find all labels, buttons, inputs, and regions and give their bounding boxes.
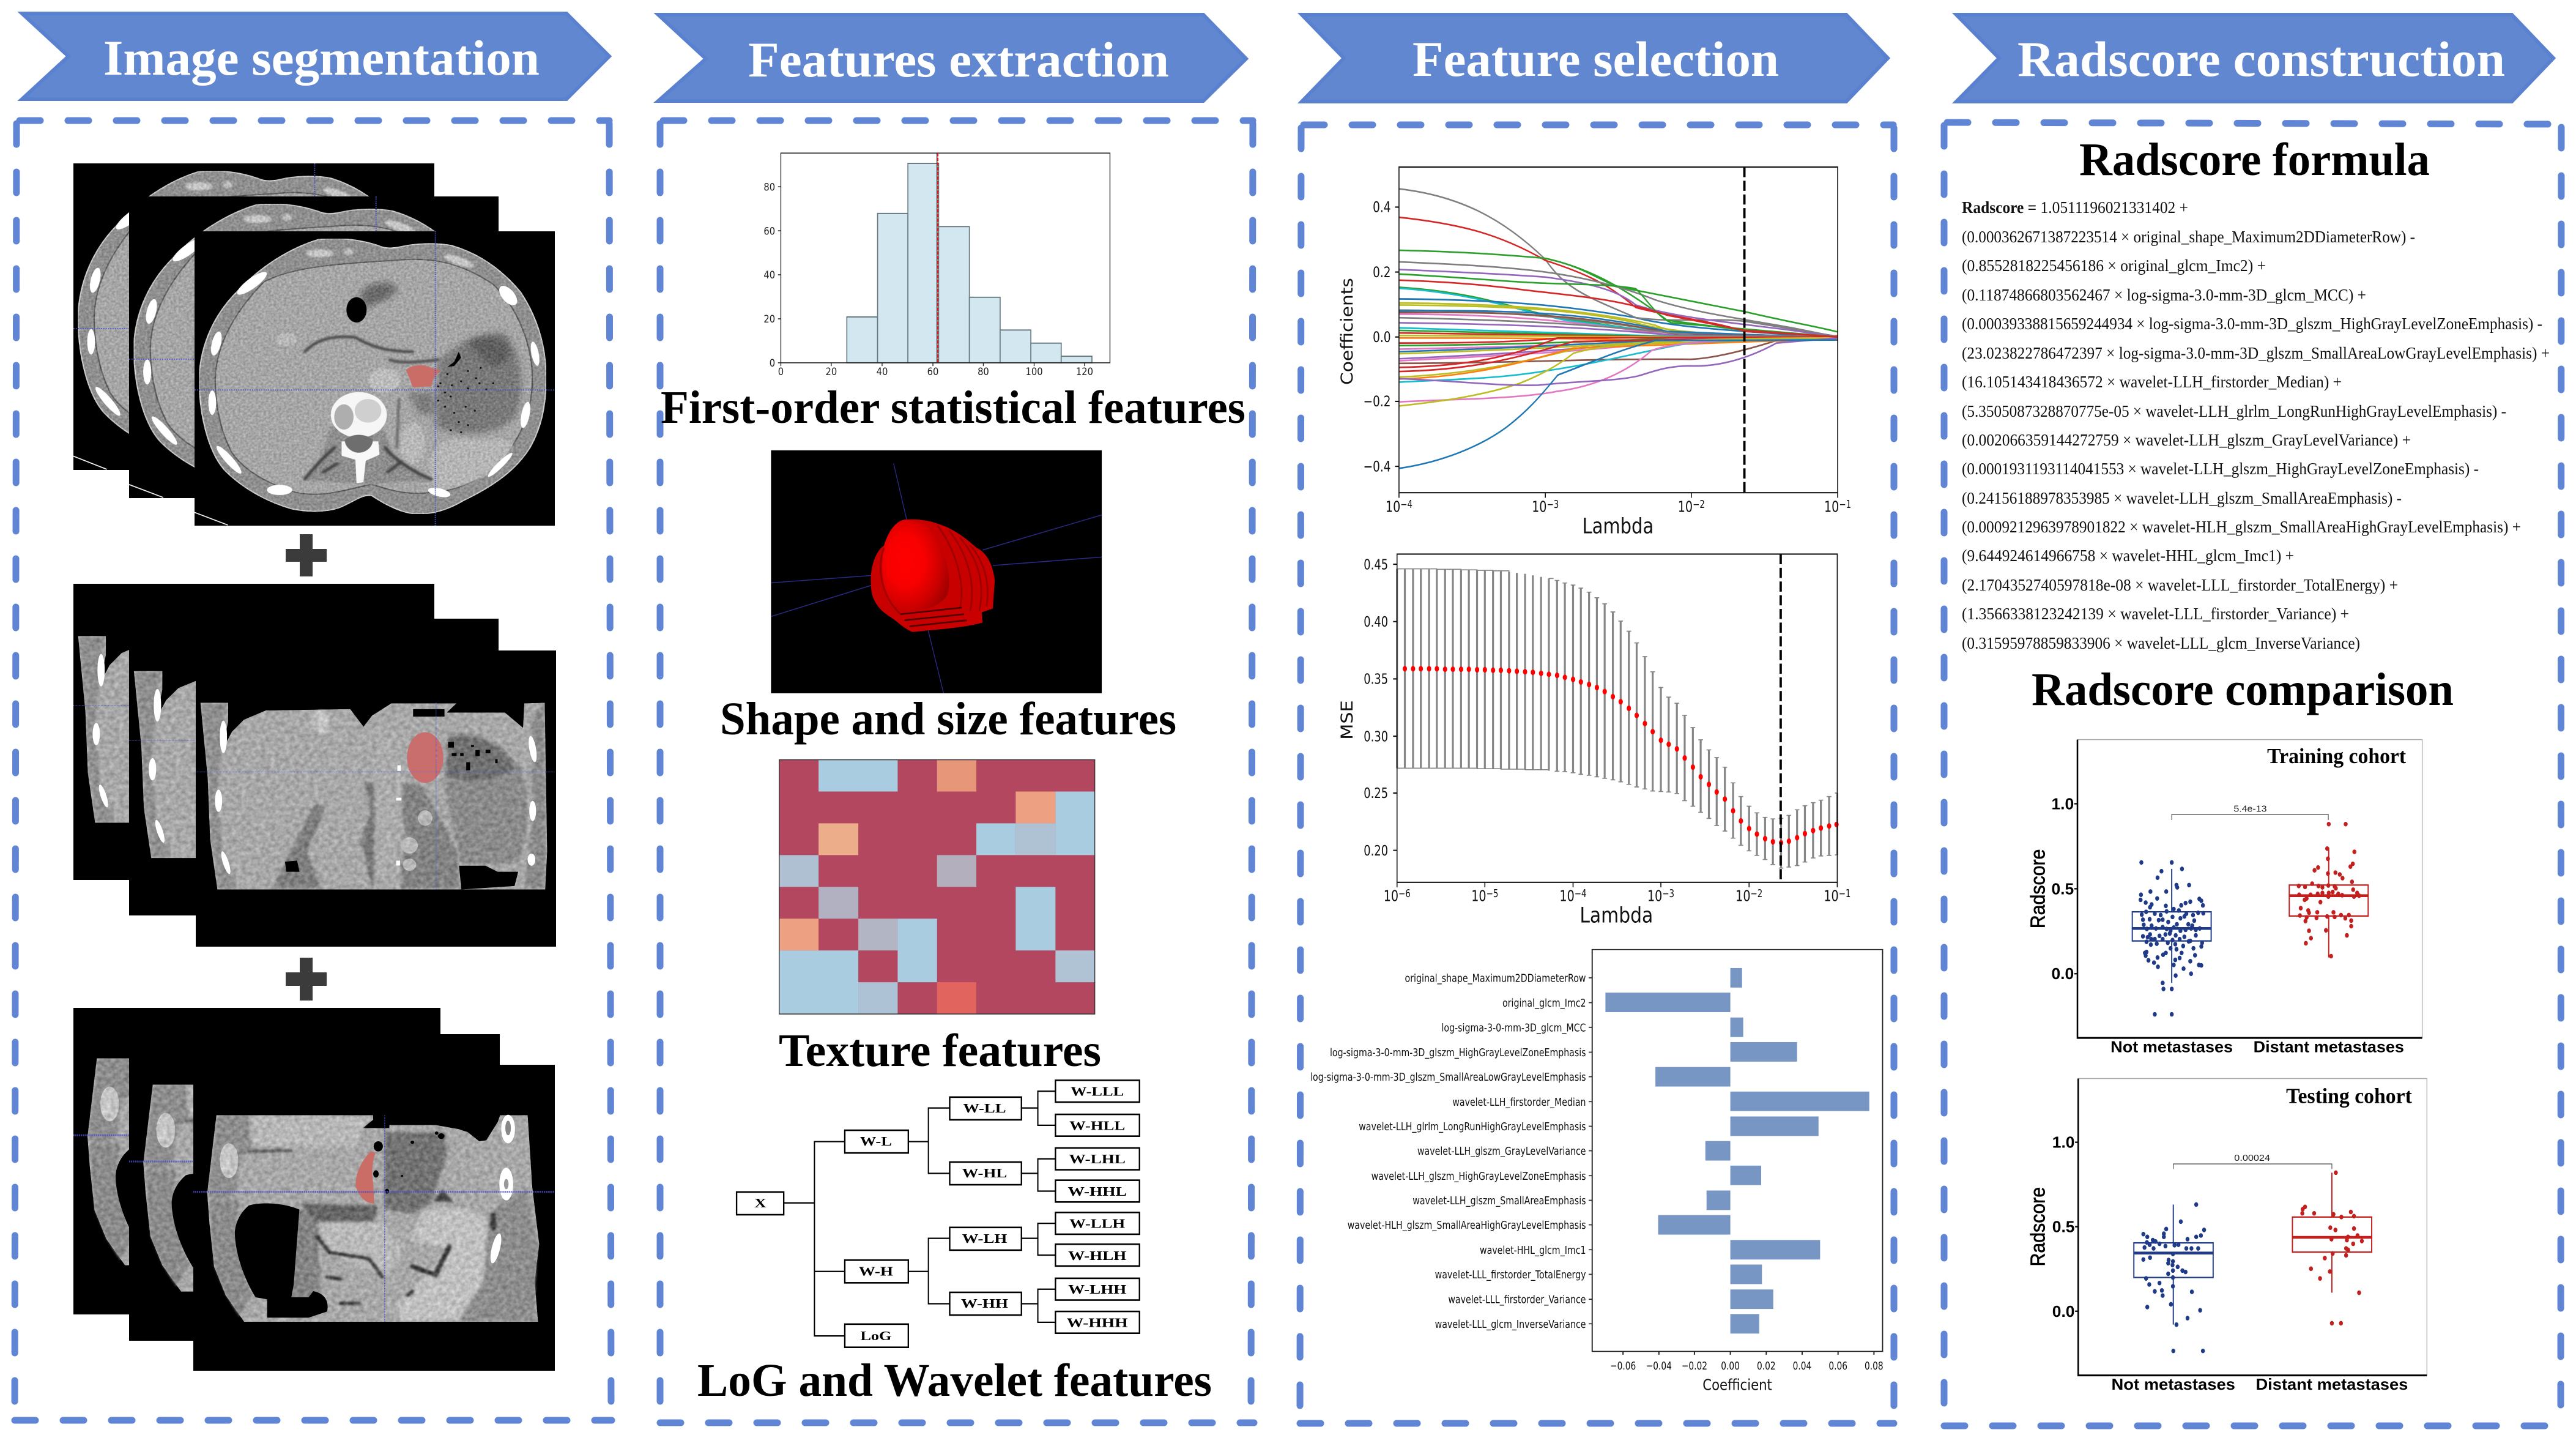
- feature coefficient bar chart: wavelet-LLH_glszm_GrayLevelVariance: [1417, 1145, 1586, 1158]
- box plot: testing cohort: 0.0: [2052, 1303, 2075, 1321]
- wavelet decomposition tree: W-HHL: [1067, 1185, 1127, 1199]
- LASSO coefficient path chart: −1: [1839, 498, 1851, 511]
- 3D tumour render: [771, 450, 1102, 693]
- dashed frame 3: [1300, 125, 1894, 1423]
- CT stack: sagittal: [73, 1008, 555, 1371]
- wavelet decomposition tree: LoG: [860, 1329, 891, 1343]
- cross-validation MSE chart: 0.30: [1364, 728, 1388, 745]
- feature coefficient bar chart: [1310, 950, 1884, 1394]
- box plot: testing cohort: 1.0: [2052, 1134, 2075, 1152]
- formula text block: [1962, 198, 2550, 652]
- LASSO coefficient path chart: Coefficients: [1338, 278, 1357, 385]
- wavelet decomposition tree: W-LHH: [1068, 1283, 1127, 1297]
- histogram chart: 40: [763, 269, 775, 281]
- formula text block: (0.00039338815659244934 × log-sigma-3.0-mm-3D_glszm_HighGrayLevelZoneEmphasis) -: [1962, 315, 2542, 333]
- feature coefficient bar chart: wavelet-LLL_firstorder_Variance: [1448, 1293, 1586, 1306]
- formula text block: (0.31595978859833906 × wavelet-LLL_glcm_InverseVariance): [1962, 634, 2360, 652]
- wavelet decomposition tree: W-HLL: [1069, 1119, 1125, 1133]
- box plot: testing cohort: 0.5: [2052, 1218, 2075, 1236]
- histogram chart: 20: [826, 365, 837, 378]
- panel: features extraction: [660, 121, 1254, 1423]
- formula text block: Radscore = 1.0511196021331402 +: [1962, 198, 2188, 217]
- feature coefficient bar chart: 0.02: [1757, 1359, 1776, 1373]
- feature coefficient bar chart: 0.00: [1721, 1359, 1740, 1373]
- cross-validation MSE chart: −4: [1575, 887, 1587, 900]
- cross-validation MSE chart: 10: [1647, 887, 1662, 905]
- box plot: testing cohort: 0.00024: [2234, 1152, 2270, 1163]
- header arrow: Radscore construction: Radscore construction: [2017, 31, 2505, 87]
- feature coefficient bar chart: wavelet-LLL_glcm_InverseVariance: [1435, 1317, 1586, 1331]
- feature coefficient bar chart: original_glcm_Imc2: [1502, 997, 1586, 1010]
- histogram chart: 100: [1025, 365, 1043, 378]
- cross-validation MSE chart: 10: [1824, 887, 1839, 905]
- feature coefficient bar chart: 0.04: [1793, 1359, 1811, 1373]
- cross-validation MSE chart: MSE: [1338, 700, 1357, 740]
- box plot: training cohort: Training cohort: [2267, 744, 2406, 768]
- cross-validation MSE chart: −2: [1751, 887, 1762, 900]
- formula text block: (0.0001931193114041553 × wavelet-LLH_glszm_HighGrayLevelZoneEmphasis) -: [1962, 460, 2479, 478]
- box plot: training cohort: Radscore: [2026, 849, 2049, 928]
- box plot: training cohort: 0.0: [2051, 966, 2074, 983]
- icon: plus 1: [286, 534, 327, 576]
- box plot: training cohort: Not metastases: [2110, 1038, 2233, 1056]
- box plot: testing cohort: Distant metastases: [2255, 1376, 2408, 1393]
- histogram chart: 40: [877, 365, 888, 378]
- feature coefficient bar chart: log-sigma-3-0-mm-3D_glszm_HighGrayLevelZoneEmphasis: [1330, 1046, 1586, 1059]
- formula text block: (23.023822786472397 × log-sigma-3.0-mm-3D_glszm_SmallAreaLowGrayLevelEmphasis) +: [1962, 344, 2550, 362]
- box plot: training cohort: Distant metastases: [2254, 1038, 2404, 1056]
- feature coefficient bar chart: 0.06: [1828, 1359, 1847, 1373]
- wavelet decomposition tree: W-LL: [963, 1101, 1006, 1116]
- LASSO coefficient path chart: 0.4: [1373, 199, 1391, 216]
- cross-validation MSE chart: −6: [1398, 887, 1411, 900]
- cross-validation MSE chart: 0.20: [1364, 843, 1388, 859]
- feature coefficient bar chart: wavelet-LLH_glszm_HighGrayLevelZoneEmphasis: [1372, 1169, 1586, 1183]
- wavelet decomposition tree: X: [754, 1196, 767, 1210]
- feature coefficient bar chart: −0.02: [1682, 1359, 1707, 1373]
- dashed frame 2: [660, 121, 1254, 1423]
- cross-validation MSE chart: −5: [1487, 887, 1498, 900]
- feature coefficient bar chart: wavelet-LLH_glrlm_LongRunHighGrayLevelEmphasis: [1359, 1120, 1586, 1133]
- heading: LoG and Wavelet features: LoG and Wavelet features: [697, 1355, 1212, 1406]
- box plot: testing cohort: Testing cohort: [2286, 1084, 2412, 1108]
- wavelet decomposition tree: W-LLH: [1069, 1217, 1126, 1231]
- heading: Radscore formula: Radscore formula: [2079, 134, 2430, 185]
- LASSO coefficient path chart: 0.0: [1373, 329, 1391, 346]
- feature coefficient bar chart: wavelet-HLH_glszm_SmallAreaHighGrayLevelEmphasis: [1348, 1219, 1586, 1232]
- LASSO coefficient path chart: [1338, 167, 1851, 539]
- CT stack: coronal: [73, 584, 556, 947]
- feature coefficient bar chart: Coefficient: [1702, 1376, 1772, 1394]
- feature coefficient bar chart: log-sigma-3-0-mm-3D_glszm_SmallAreaLowGrayLevelEmphasis: [1310, 1071, 1586, 1084]
- wavelet decomposition tree: W-LLL: [1071, 1085, 1124, 1099]
- heading: First-order statistical features: First-order statistical features: [661, 382, 1245, 433]
- LASSO coefficient path chart: −2: [1693, 498, 1705, 511]
- box plot: training cohort: 0.5: [2051, 881, 2074, 898]
- feature coefficient bar chart: original_shape_Maximum2DDiameterRow: [1405, 972, 1586, 985]
- header arrow: Radscore construction: [1956, 15, 2553, 102]
- cross-validation MSE chart: 0.25: [1364, 785, 1388, 802]
- dashed frame 4: [1944, 122, 2563, 1426]
- formula text block: (0.8552818225456186 × original_glcm_Imc2) +: [1962, 256, 2266, 275]
- feature coefficient bar chart: wavelet-LLH_firstorder_Median: [1452, 1095, 1586, 1109]
- formula text block: (0.11874866803562467 × log-sigma-3.0-mm-3D_glcm_MCC) +: [1962, 286, 2366, 304]
- box plot: training cohort: 5.4e-13: [2233, 803, 2267, 814]
- LASSO coefficient path chart: 10: [1386, 498, 1400, 516]
- wavelet decomposition tree: [737, 1080, 1140, 1347]
- cross-validation MSE chart: 10: [1559, 887, 1575, 905]
- box plot: training cohort: [2026, 740, 2422, 1056]
- histogram chart: 80: [978, 365, 989, 378]
- formula text block: (1.3566338123242139 × wavelet-LLL_firstorder_Variance) +: [1962, 605, 2349, 623]
- feature coefficient bar chart: wavelet-LLH_glszm_SmallAreaEmphasis: [1412, 1194, 1586, 1207]
- formula text block: (2.1704352740597818e-08 × wavelet-LLL_firstorder_TotalEnergy) +: [1962, 576, 2398, 594]
- LASSO coefficient path chart: 10: [1678, 498, 1693, 516]
- feature coefficient bar chart: −0.06: [1610, 1359, 1636, 1373]
- feature coefficient bar chart: log-sigma-3-0-mm-3D_glcm_MCC: [1441, 1021, 1586, 1034]
- wavelet decomposition tree: W-HL: [962, 1166, 1007, 1180]
- header arrow: Image segmentation: Image segmentation: [103, 30, 540, 86]
- wavelet decomposition tree: W-H: [859, 1265, 894, 1279]
- LASSO coefficient path chart: Lambda: [1582, 514, 1654, 539]
- wavelet decomposition tree: W-HLH: [1068, 1249, 1127, 1263]
- histogram chart: 60: [763, 225, 775, 237]
- LASSO coefficient path chart: −3: [1546, 498, 1559, 511]
- box plot: testing cohort: [2026, 1078, 2427, 1393]
- LASSO coefficient path chart: 10: [1824, 498, 1839, 516]
- formula text block: (0.002066359144272759 × wavelet-LLH_glszm_GrayLevelVariance) +: [1962, 431, 2411, 449]
- cross-validation MSE chart: Lambda: [1579, 903, 1653, 928]
- formula text block: (16.105143418436572 × wavelet-LLH_firstorder_Median) +: [1962, 373, 2342, 391]
- LASSO coefficient path chart: 0.2: [1373, 264, 1391, 281]
- panel: image segmentation: [15, 121, 612, 1420]
- heading: Radscore comparison: Radscore comparison: [2032, 664, 2454, 715]
- formula text block: (0.0009212963978901822 × wavelet-HLH_glszm_SmallAreaHighGrayLevelEmphasis) +: [1962, 518, 2521, 536]
- heading: Texture features: Texture features: [779, 1025, 1101, 1076]
- histogram chart: 80: [763, 181, 775, 193]
- box plot: testing cohort: Radscore: [2026, 1187, 2049, 1267]
- histogram chart: 0: [778, 365, 784, 378]
- histogram chart: 120: [1076, 365, 1093, 378]
- formula text block: (0.000362671387223514 × original_shape_Maximum2DDiameterRow) -: [1962, 228, 2415, 246]
- histogram chart: [763, 153, 1110, 378]
- histogram chart: 0: [770, 357, 775, 369]
- cross-validation MSE chart: 0.40: [1364, 614, 1388, 630]
- feature coefficient bar chart: 0.08: [1865, 1359, 1884, 1373]
- icon: plus 2: [286, 958, 327, 1001]
- LASSO coefficient path chart: 10: [1532, 498, 1546, 516]
- formula text block: (5.3505087328870775e-05 × wavelet-LLH_glrlm_LongRunHighGrayLevelEmphasis) -: [1962, 402, 2506, 420]
- LASSO coefficient path chart: −0.4: [1364, 458, 1391, 475]
- header arrow: Features extraction: [658, 15, 1246, 101]
- cross-validation MSE chart: −1: [1839, 887, 1850, 900]
- panel: feature selection: [1300, 125, 1894, 1423]
- histogram chart: 60: [927, 365, 938, 378]
- CT stack: axial: [73, 163, 555, 526]
- wavelet decomposition tree: W-LH: [962, 1232, 1008, 1246]
- formula text block: (9.644924614966758 × wavelet-HHL_glcm_Imc1) +: [1962, 546, 2294, 565]
- header arrow: Image segmentation: [22, 13, 609, 99]
- texture heatmap: [779, 760, 1095, 1014]
- wavelet decomposition tree: W-L: [860, 1135, 892, 1149]
- wavelet decomposition tree: W-HHH: [1067, 1316, 1128, 1330]
- cross-validation MSE chart: 10: [1735, 887, 1751, 905]
- cross-validation MSE chart: [1338, 554, 1850, 928]
- formula text block: (0.24156188978353985 × wavelet-LLH_glszm_SmallAreaEmphasis) -: [1962, 489, 2402, 507]
- cross-validation MSE chart: 0.45: [1364, 556, 1388, 573]
- header arrow: Feature selection: Feature selection: [1412, 31, 1779, 87]
- cross-validation MSE chart: 0.35: [1364, 671, 1388, 687]
- box plot: testing cohort: Not metastases: [2111, 1376, 2235, 1393]
- wavelet decomposition tree: W-HH: [961, 1297, 1009, 1311]
- box plot: training cohort: 1.0: [2051, 796, 2074, 813]
- LASSO coefficient path chart: −0.2: [1364, 393, 1391, 411]
- histogram chart: 20: [763, 313, 775, 325]
- cross-validation MSE chart: −3: [1662, 887, 1674, 900]
- LASSO coefficient path chart: −4: [1400, 498, 1412, 511]
- wavelet decomposition tree: W-LHL: [1069, 1152, 1126, 1166]
- header arrow: Features extraction: Features extraction: [748, 32, 1169, 88]
- feature coefficient bar chart: wavelet-LLL_firstorder_TotalEnergy: [1435, 1268, 1586, 1281]
- dashed frame 1: [15, 121, 612, 1420]
- heading: Shape and size features: Shape and size features: [720, 693, 1176, 745]
- panel: radscore construction: [1944, 122, 2563, 1426]
- cross-validation MSE chart: 10: [1471, 887, 1487, 905]
- feature coefficient bar chart: wavelet-HHL_glcm_Imc1: [1480, 1243, 1586, 1257]
- feature coefficient bar chart: −0.04: [1646, 1359, 1672, 1373]
- header arrow: Feature selection: [1302, 15, 1888, 102]
- cross-validation MSE chart: 10: [1384, 887, 1398, 905]
